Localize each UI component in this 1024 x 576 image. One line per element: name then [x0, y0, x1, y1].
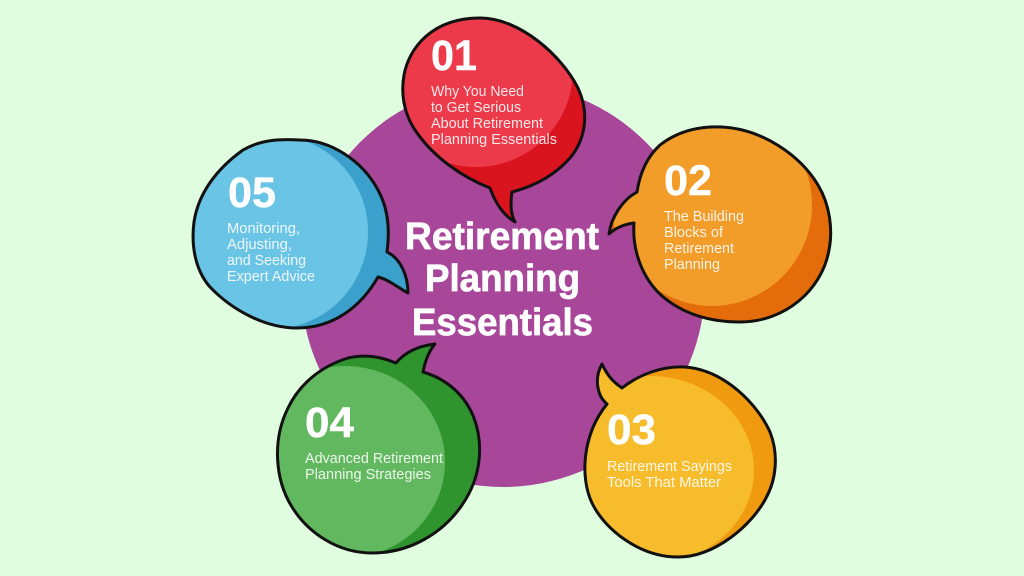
bubble 01: red: About Retirement [431, 116, 543, 132]
bubble 01: red: 01 [431, 32, 477, 80]
bubble 03: yellow: 03 [607, 406, 656, 454]
bubble 03: yellow: Tools That Matter [607, 475, 721, 491]
bubble 02: orange: Planning [664, 257, 720, 273]
bubble 04: green: Advanced Retirement [305, 451, 443, 467]
bubble 05: blue: Monitoring, [227, 221, 300, 237]
bubble 02: orange [609, 104, 831, 322]
bubble 03: yellow [583, 362, 777, 558]
bubble 05: blue: Adjusting, [227, 237, 292, 253]
title: Essentials [412, 302, 593, 344]
bubble 01: red: Why You Need [431, 84, 524, 100]
bubble 02: orange: 02 [664, 157, 712, 205]
bubble 02: orange: Retirement [664, 241, 734, 257]
bubble 01: red [401, 16, 586, 224]
bubble 05: blue: 05 [228, 169, 276, 217]
bubble 05: blue: Expert Advice [227, 269, 315, 285]
bubble 01: red: Planning Essentials [431, 132, 557, 148]
title: Planning [425, 258, 580, 300]
bubble 01: red: to Get Serious [431, 100, 521, 116]
purple central circle [301, 83, 705, 487]
title: Retirement [405, 216, 599, 258]
bubble 02: orange: Blocks of [664, 225, 724, 241]
bubble 05: blue [176, 135, 408, 329]
bubble 04: green: Planning Strategies [305, 467, 431, 483]
bubble 04: green: 04 [305, 399, 354, 447]
title [405, 216, 599, 344]
bubble 05: blue: and Seeking [227, 253, 306, 269]
bubble 03: yellow: Retirement Sayings [607, 459, 732, 475]
bubble 04: green [276, 342, 482, 554]
bubble 02: orange: The Building [664, 209, 744, 225]
